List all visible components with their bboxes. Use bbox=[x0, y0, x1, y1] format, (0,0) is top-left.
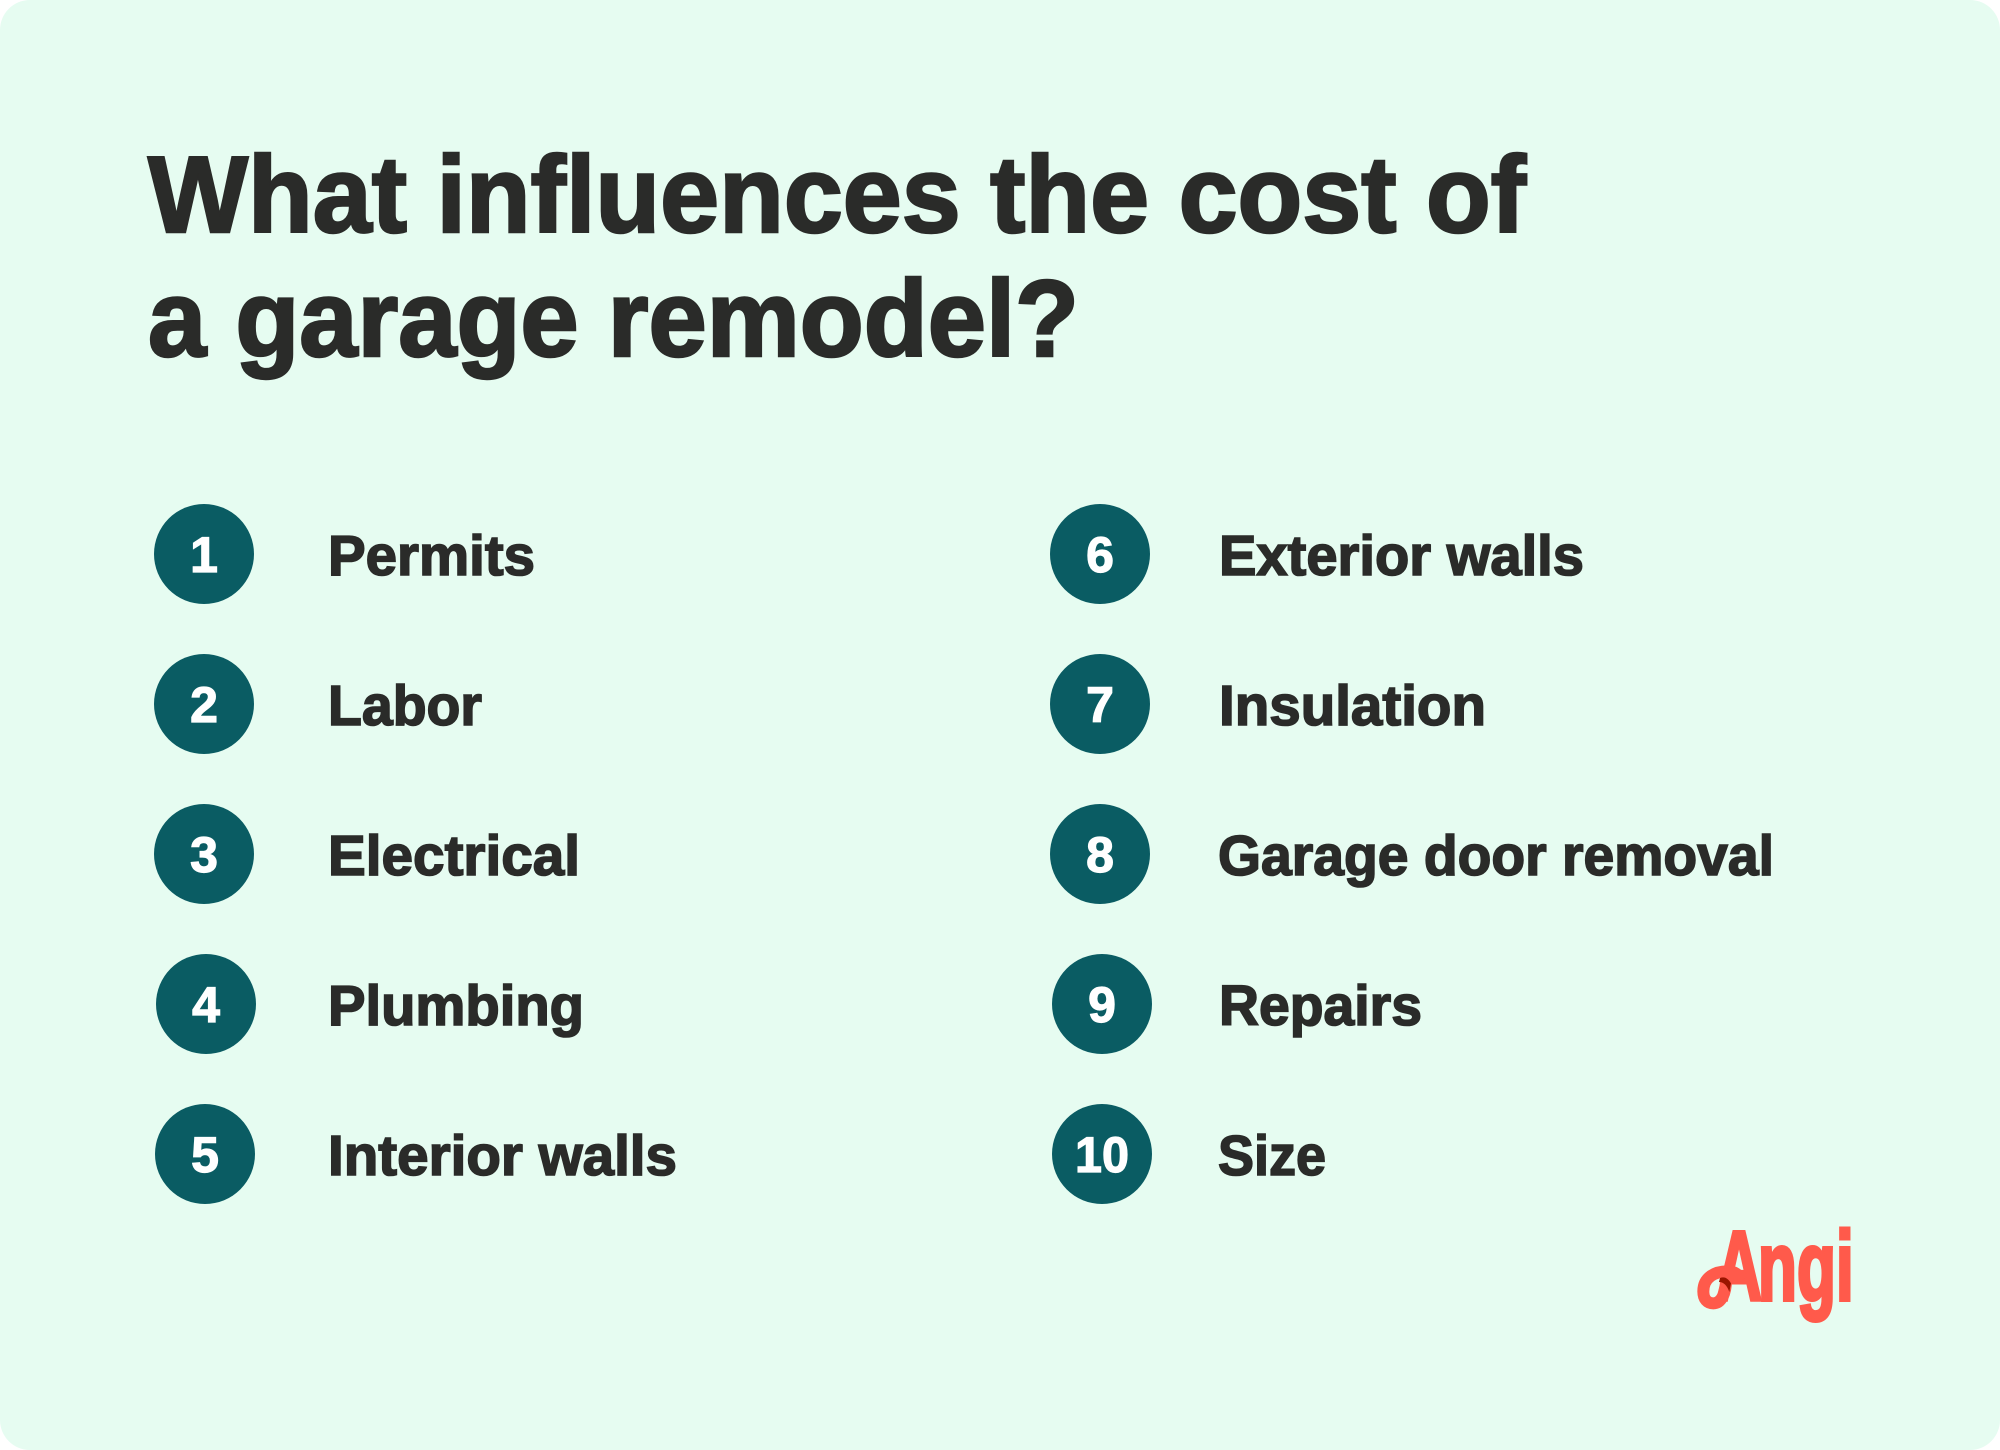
item 4: Plumbing bbox=[156, 954, 584, 1054]
item 9: Repairs bbox=[1052, 954, 1422, 1054]
item 7: Insulation bbox=[1050, 654, 1486, 754]
item 1: Permits bbox=[154, 504, 535, 604]
item 7: Insulation: 7 bbox=[1086, 677, 1114, 733]
title bbox=[148, 134, 1527, 380]
list: left column bbox=[154, 504, 677, 1204]
item 5: Interior walls: Interior walls bbox=[328, 1124, 677, 1188]
item 8: Garage door removal bbox=[1050, 804, 1774, 904]
item 3: Electrical: 3 bbox=[190, 827, 218, 883]
item 5: Interior walls: 5 bbox=[191, 1127, 219, 1183]
item 10: Size bbox=[1052, 1104, 1326, 1204]
item 1: Permits: 1 bbox=[190, 527, 218, 583]
item 4: Plumbing: 4 bbox=[192, 977, 220, 1033]
item 6: Exterior walls bbox=[1050, 504, 1584, 604]
list: right column bbox=[1050, 504, 1774, 1204]
item 7: Insulation: Insulation bbox=[1219, 674, 1486, 738]
item 8: Garage door removal: Garage door removal bbox=[1218, 824, 1774, 888]
item 9: Repairs: Repairs bbox=[1219, 974, 1422, 1038]
item 9: Repairs: 9 bbox=[1088, 977, 1116, 1033]
title: What influences the cost of bbox=[148, 134, 1527, 256]
item 6: Exterior walls: 6 bbox=[1086, 527, 1114, 583]
logo: Angi: Angi bbox=[1716, 1211, 1854, 1321]
item 2: Labor: Labor bbox=[328, 674, 482, 738]
item 1: Permits: Permits bbox=[328, 524, 535, 588]
item 2: Labor bbox=[154, 654, 482, 754]
item 2: Labor: 2 bbox=[190, 677, 218, 733]
item 3: Electrical bbox=[154, 804, 580, 904]
item 5: Interior walls bbox=[155, 1104, 677, 1204]
item 3: Electrical: Electrical bbox=[328, 824, 580, 888]
title: a garage remodel? bbox=[148, 258, 1079, 380]
item 10: Size: Size bbox=[1218, 1124, 1326, 1188]
item 10: Size: 10 bbox=[1075, 1127, 1129, 1183]
item 4: Plumbing: Plumbing bbox=[328, 974, 584, 1038]
item 8: Garage door removal: 8 bbox=[1086, 827, 1114, 883]
item 6: Exterior walls: Exterior walls bbox=[1219, 524, 1584, 588]
